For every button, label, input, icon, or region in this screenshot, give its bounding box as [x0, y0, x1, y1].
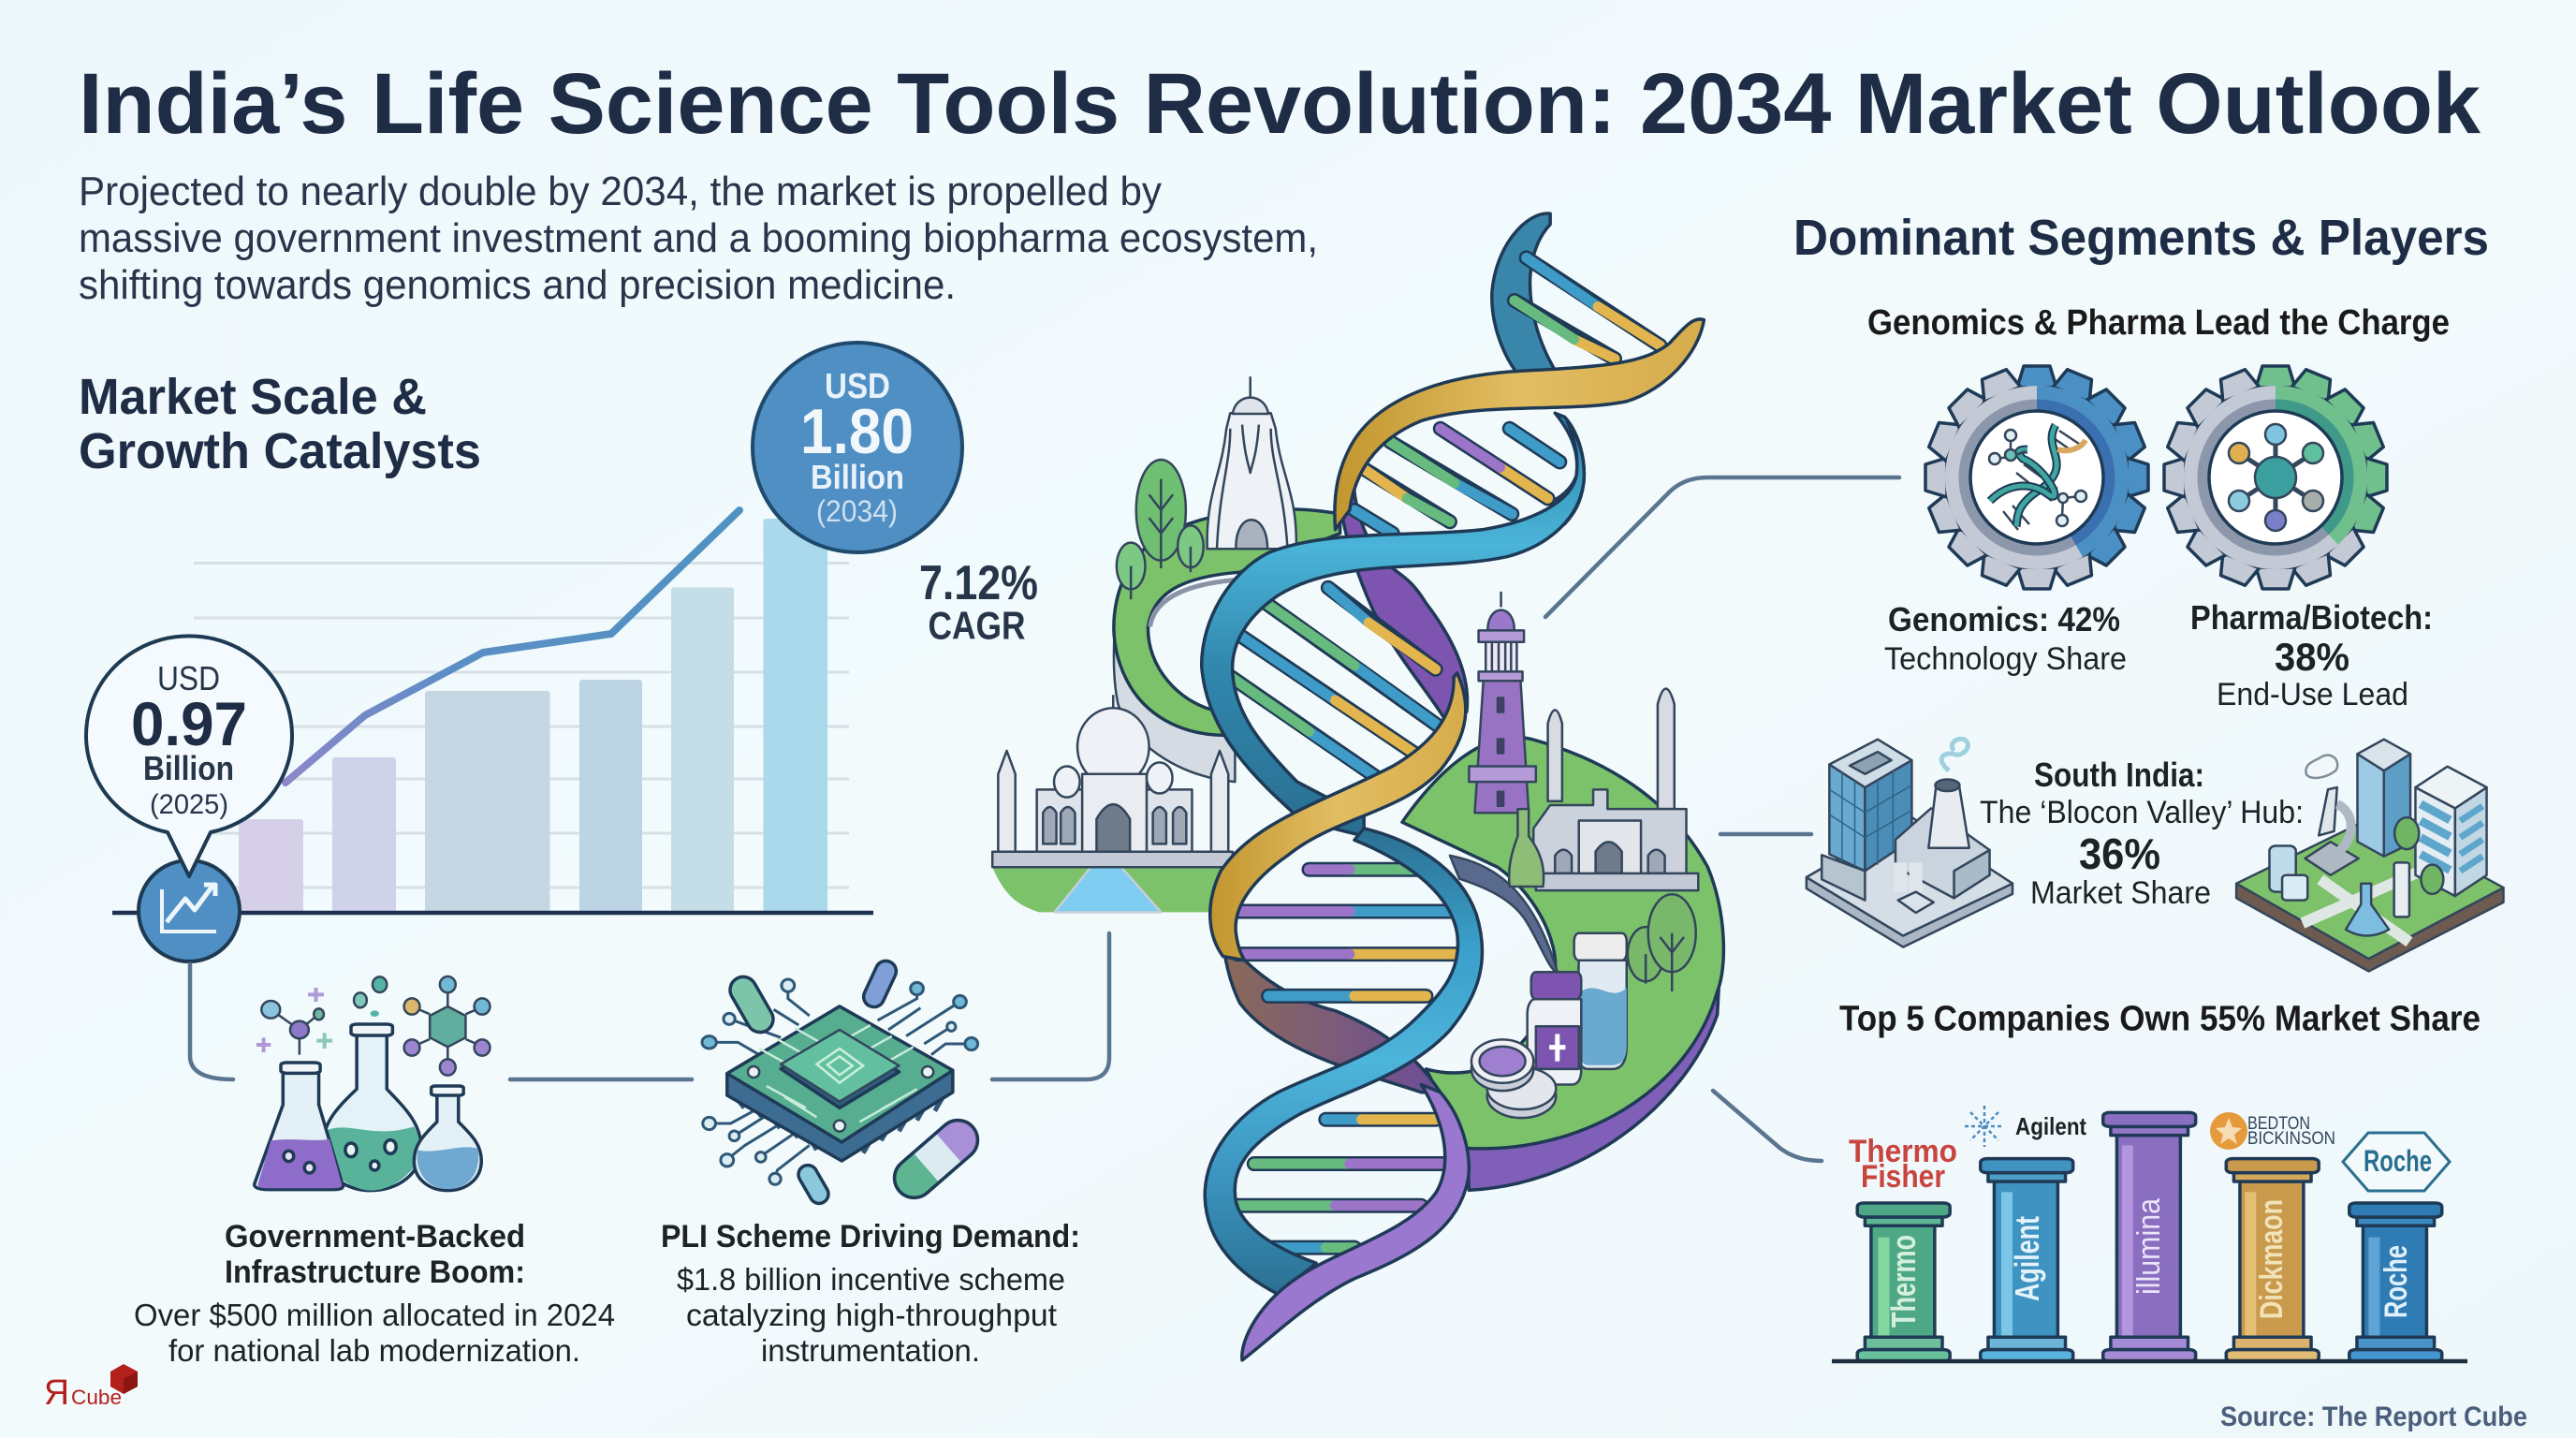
stat: genomics: Genomics: 42%: [1888, 600, 2120, 638]
stat: pharma biotech: Pharma/Biotech:: [2190, 598, 2433, 637]
trace pads: [702, 979, 978, 1184]
stat: south india: 36%: [2079, 829, 2160, 878]
callout: 2025 value: 0.97: [131, 689, 247, 758]
chip die: [781, 1033, 899, 1108]
petri dishes: [1471, 1039, 1556, 1118]
intro paragraph: shifting towards genomics and precision medicine.: [79, 262, 956, 308]
molecule left: [261, 1001, 324, 1055]
icon: genomics gear: [1925, 366, 2148, 589]
logo: thermo fisher: [1849, 1134, 1957, 1195]
trees upper: [1117, 460, 1204, 599]
text: PLI scheme: PLI Scheme Driving Demand:: [661, 1219, 1080, 1255]
source note: Source: The Report Cube: [2220, 1401, 2527, 1432]
stat: pharma biotech: 38%: [2275, 635, 2349, 679]
traces: [710, 990, 971, 1178]
chip body: [727, 1006, 953, 1161]
heading: dominant segments: Dominant Segments & Players: [1793, 210, 2489, 266]
icon: microchip: [702, 979, 978, 1184]
stat: south india: Market Share: [2030, 875, 2211, 911]
lower land: [1402, 738, 1723, 1190]
upper land ring: [1114, 509, 1340, 782]
text: PLI scheme: $1.8 billion incentive scheme: [677, 1262, 1065, 1297]
cagr label: [919, 556, 1038, 648]
right flask: [414, 1086, 481, 1191]
growth trend line: [285, 510, 739, 783]
text: government infrastructure: Government-Backed: [225, 1219, 525, 1255]
heading: market scale: [79, 369, 481, 479]
chip traces: [759, 1025, 917, 1122]
callout: 2034 value: [753, 343, 962, 552]
lighthouse tower: [1469, 592, 1536, 813]
pillar: roche: [2349, 1203, 2442, 1361]
callout: 2034 value: (2034): [816, 494, 898, 528]
middle flask: [322, 1024, 421, 1191]
subheading: top 5 companies: Top 5 Companies Own 55% Market Share: [1839, 1000, 2481, 1039]
cagr label: 7.12%: [919, 556, 1038, 610]
pillar: thermo: [1857, 1203, 1950, 1361]
pillar: dickmaon: [2226, 1159, 2319, 1361]
stat: pharma biotech: [2190, 598, 2433, 712]
cagr label: CAGR: [929, 603, 1026, 648]
callout: 2034 value: 1.80: [800, 396, 914, 467]
stat: south india: [1980, 756, 2304, 911]
logo: agilent: [1965, 1106, 2086, 1147]
logo: thermo fisher: Fisher: [1861, 1159, 1945, 1195]
chip top face: [727, 1006, 953, 1142]
logo: agilent: Agilent: [2015, 1112, 2086, 1140]
text: government infrastructure: [134, 1219, 615, 1368]
intro paragraph: [79, 169, 1318, 308]
bar chart: [112, 519, 873, 913]
pillar labels: Agilent: [2008, 1216, 2046, 1301]
helix front strands: [1202, 319, 1704, 1360]
sparkles: [256, 976, 387, 1052]
callout: 2034 value: Billion: [811, 458, 904, 496]
stat: south india: South India:: [2034, 756, 2204, 794]
molecule right: [404, 976, 490, 1076]
icon: capsule: [886, 1112, 986, 1206]
taj mahal: [992, 695, 1233, 912]
connector: chart to catalysts to helix: [190, 933, 1109, 1079]
logo: RCube: [44, 1364, 138, 1413]
logo: thermo fisher: Thermo: [1849, 1134, 1957, 1169]
text: government infrastructure: for national lab modernization.: [168, 1333, 580, 1368]
pillar labels: Dickmaon: [2254, 1199, 2290, 1319]
icon: small pills: [725, 958, 900, 1207]
green bottle: [1509, 809, 1544, 887]
text: government infrastructure: Infrastructure Boom:: [225, 1255, 525, 1290]
pillar: illumina: [2103, 1112, 2196, 1361]
text: PLI scheme: catalyzing high-throughput: [686, 1298, 1057, 1332]
factory landmark: [1533, 689, 1698, 890]
callout: 2025 value: (2025): [150, 789, 228, 820]
stat: genomics: Technology Share: [1884, 641, 2127, 677]
pillar labels: Thermo: [1884, 1235, 1923, 1328]
logo: RCube: Cube: [71, 1386, 122, 1409]
heading: market scale: Growth Catalysts: [79, 423, 481, 479]
callout: 2034 value: USD: [825, 367, 890, 406]
die pattern: [816, 1049, 863, 1083]
text: PLI scheme: [661, 1219, 1080, 1368]
chip pins: [734, 1095, 942, 1153]
intro paragraph: massive government investment and a booming biopharma ecosystem,: [79, 215, 1318, 261]
temple: [1207, 376, 1298, 549]
icon: growth chart circle: [139, 860, 240, 961]
pillar labels: Roche: [2378, 1245, 2414, 1318]
medicine jars: [1528, 933, 1627, 1084]
icon: isometric factory: [1807, 739, 2012, 947]
icon: isometric biotech park: [2236, 740, 2503, 971]
logo: becton dickinson: [2210, 1112, 2335, 1150]
central illustration: helix and landmarks: [992, 213, 1723, 1360]
stat: genomics: [1884, 600, 2127, 677]
icon: lab flasks: [255, 976, 490, 1191]
subheading: genomics and pharma: Genomics & Pharma Lead the Charge: [1867, 303, 2450, 343]
logo: becton dickinson: BICKINSON: [2247, 1129, 2335, 1149]
heading: market scale: Market Scale &: [79, 369, 427, 425]
pillar: agilent: [1981, 1159, 2073, 1361]
logo: becton dickinson: BEDTON: [2247, 1114, 2310, 1134]
title: India’s Life Science Tools Revolution: 2034 Market Outlook: [79, 56, 2481, 152]
left flask: [255, 1063, 343, 1190]
pillar labels: illumina: [2131, 1198, 2167, 1295]
connectors to right panel: [1545, 477, 1899, 1161]
logo: RCube: Я: [44, 1373, 69, 1413]
logo: roche: [2343, 1133, 2450, 1191]
helix rungs: [1225, 257, 1660, 1248]
chip die top: [781, 1030, 899, 1102]
helix back strands: [1223, 213, 1584, 1093]
icon: pharma gear: [2164, 366, 2387, 589]
intro paragraph: Projected to nearly double by 2034, the market is propelled by: [79, 169, 1162, 214]
stat: south india: The ‘Blocon Valley’ Hub:: [1980, 795, 2304, 830]
callout: 2025 value: USD: [157, 659, 220, 697]
pillar labels: [1884, 1198, 2414, 1328]
stat: pharma biotech: End-Use Lead: [2217, 677, 2408, 712]
logo: roche: Roche: [2364, 1144, 2432, 1178]
tree lower: [1628, 894, 1696, 991]
callout: 2025 value: [86, 636, 292, 876]
text: PLI scheme: instrumentation.: [761, 1333, 980, 1368]
pillar chart: [1832, 1112, 2467, 1361]
callout: 2025 value: Billion: [143, 749, 234, 787]
text: government infrastructure: Over $500 million allocated in 2024: [134, 1298, 615, 1332]
